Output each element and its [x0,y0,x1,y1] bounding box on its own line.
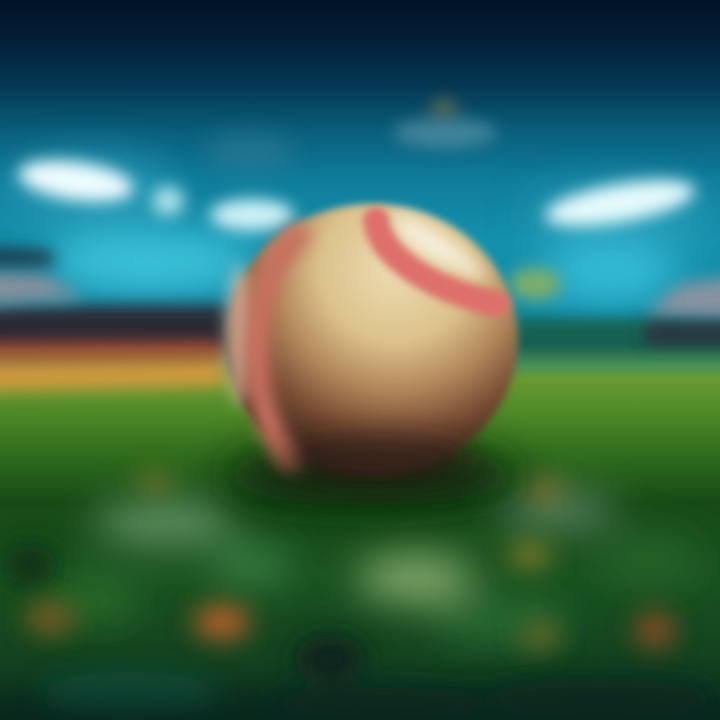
light: faint upper left [206,135,294,169]
stands roof [0,268,85,308]
stands: right [509,268,720,363]
baseball [226,204,518,482]
foreground grass texture [4,473,718,720]
light: center left bank [210,199,294,231]
pale left edge [226,265,254,405]
stands roof [645,272,720,322]
ball lower shade [275,434,475,482]
seam: left [257,236,298,458]
bottom vignette [0,680,720,720]
blurred dark patches [4,545,718,720]
blurred orange flecks [26,473,675,649]
ball body [226,204,518,476]
light: small left bank [152,186,184,216]
light: right bank [542,171,698,235]
stadium lights [16,99,698,235]
stands base [510,318,720,363]
highlight upper right [392,214,490,282]
stands top shadow [0,245,55,266]
orange warning track [0,346,225,392]
night sky background [0,0,720,400]
stands red rail [0,342,220,362]
blurred pale clumps [40,490,700,642]
grass field [0,345,720,720]
stands base [0,305,230,355]
light: faint amber crest [430,99,458,117]
stands dark tier [645,322,720,346]
amber band [0,358,225,392]
ball contact shadow [220,445,520,505]
light: far left bank [16,154,136,208]
green blur by the ball [509,268,561,300]
glowing haze behind the stands [5,155,715,302]
stands: left [0,245,230,362]
red band [0,346,225,364]
seam: upper right [376,220,496,304]
light: faint upper center [393,118,497,148]
